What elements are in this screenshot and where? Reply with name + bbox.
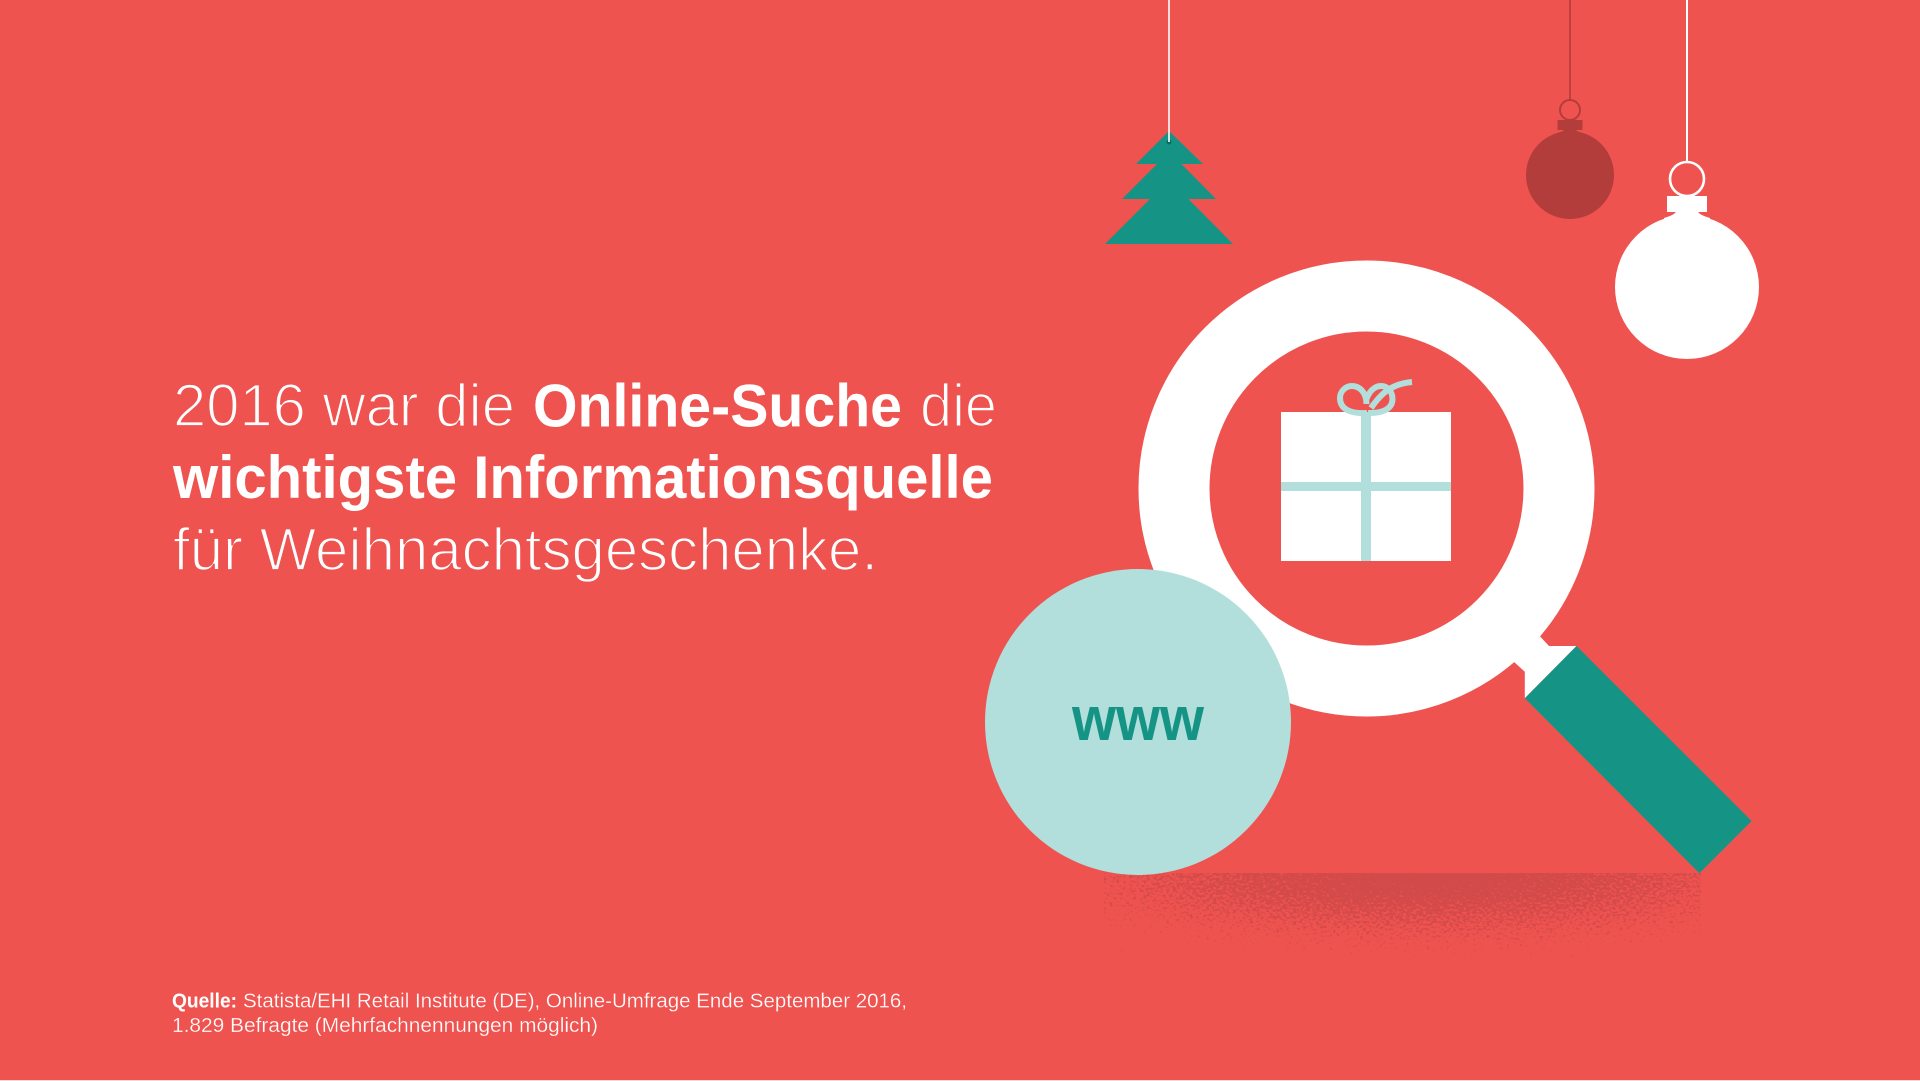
icon: magnifying glass xyxy=(1174,296,1752,873)
icon: white bauble xyxy=(1615,0,1759,359)
source note: Statista/EHI Retail Institute (DE), Online-Umfrage Ende September 2016, xyxy=(243,990,907,1012)
headline: 2016 war die xyxy=(173,372,515,439)
headline xyxy=(172,372,997,583)
headline: für Weihnachtsgeschenke. xyxy=(173,516,878,583)
magnifier ring xyxy=(1174,296,1559,681)
www circle xyxy=(985,569,1291,875)
magnifier connector xyxy=(1514,636,1576,698)
source note: 1.829 Befragte (Mehrfachnennungen möglich) xyxy=(172,1015,598,1037)
bottom edge line xyxy=(0,1080,1920,1081)
source note: Quelle: xyxy=(172,990,237,1012)
headline: die xyxy=(920,372,997,439)
ground shadow xyxy=(1104,873,1701,963)
headline: Online-Suche xyxy=(533,372,902,440)
gift bow xyxy=(1340,382,1412,413)
magnifier handle xyxy=(1525,646,1752,873)
icon: hanging christmas tree xyxy=(1105,0,1233,244)
icon: gift box xyxy=(1281,382,1451,561)
headline: wichtigste Informationsquelle xyxy=(172,444,993,511)
www label: www xyxy=(1071,685,1205,754)
source note xyxy=(172,990,907,1037)
gift ribbon xyxy=(1281,412,1451,561)
icon: dark red bauble xyxy=(1526,0,1614,219)
gift box body xyxy=(1281,412,1451,561)
